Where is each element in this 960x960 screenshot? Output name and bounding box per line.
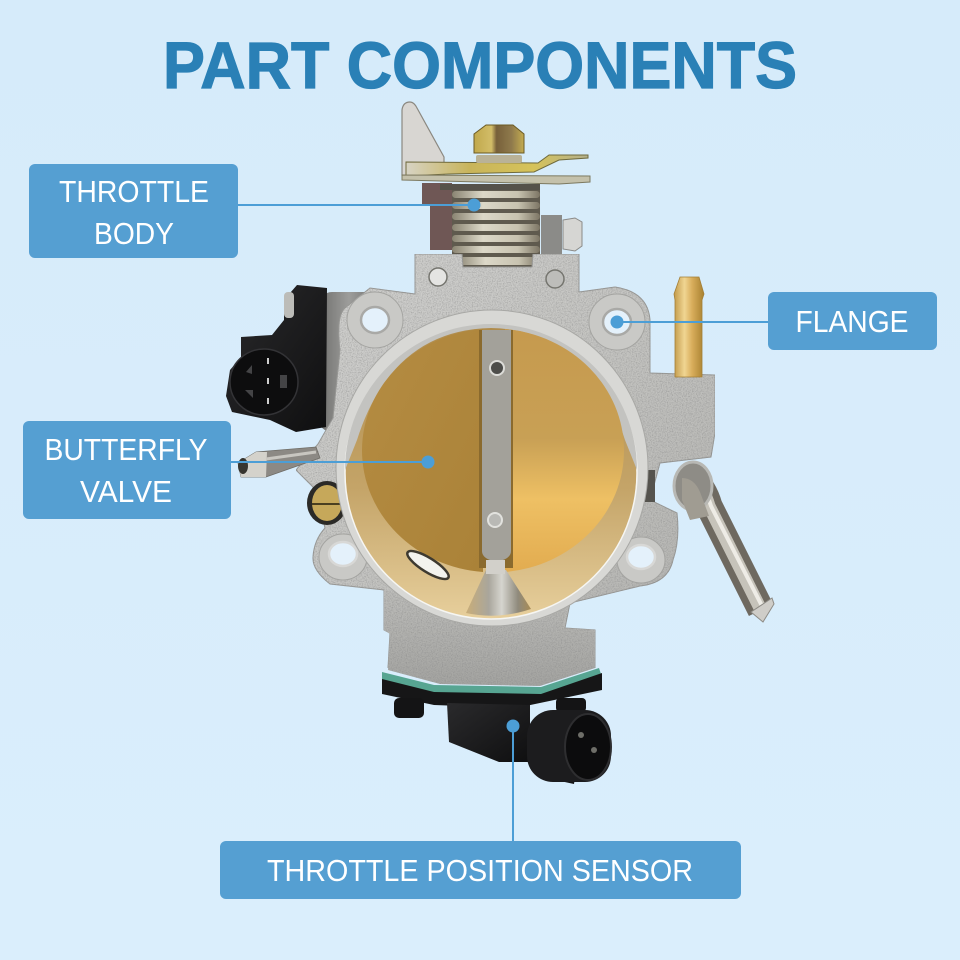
silver lip at top of bore [345,324,637,470]
title: PART COMPONENTS [163,28,797,102]
brass idle screw [307,481,347,525]
bore brass wall [345,327,637,619]
dark casting behind connector [318,292,380,432]
callout: flange [610,292,937,350]
callout: butterfly valve: BUTTERFLY [44,432,208,467]
throttle body illustration [226,102,774,784]
callout: throttle body: THROTTLE [59,174,209,209]
callout: throttle body [29,164,480,258]
black sensor flange [382,673,602,708]
brown lever block [422,183,452,250]
callout: butterfly valve: VALVE [80,474,172,509]
return spring [452,185,540,267]
callout: throttle body: BODY [94,216,174,251]
top bolts [429,268,564,288]
callout: butterfly valve [23,421,434,519]
callout: flange: FLANGE [796,304,908,339]
cone reflection [466,570,531,616]
position sensor [394,698,611,784]
callout: throttle position sensor: THROTTLE POSITION SENSOR [267,853,693,888]
black idle connector [226,285,327,432]
bent steel pipe [645,462,774,622]
callout: throttle position sensor [220,720,741,899]
flange bolt holes [319,292,665,583]
butterfly valve plate [362,329,624,616]
neck shading [384,590,595,686]
top bracket and linkage [402,102,590,190]
side bracket and bolt [541,215,582,255]
slot opening [404,546,452,584]
brass hose barb [674,277,704,377]
bore ring [336,310,648,626]
green gasket [382,668,601,696]
main flange casting [296,254,715,668]
left steel nipple [238,447,320,477]
centre shaft [479,330,513,568]
